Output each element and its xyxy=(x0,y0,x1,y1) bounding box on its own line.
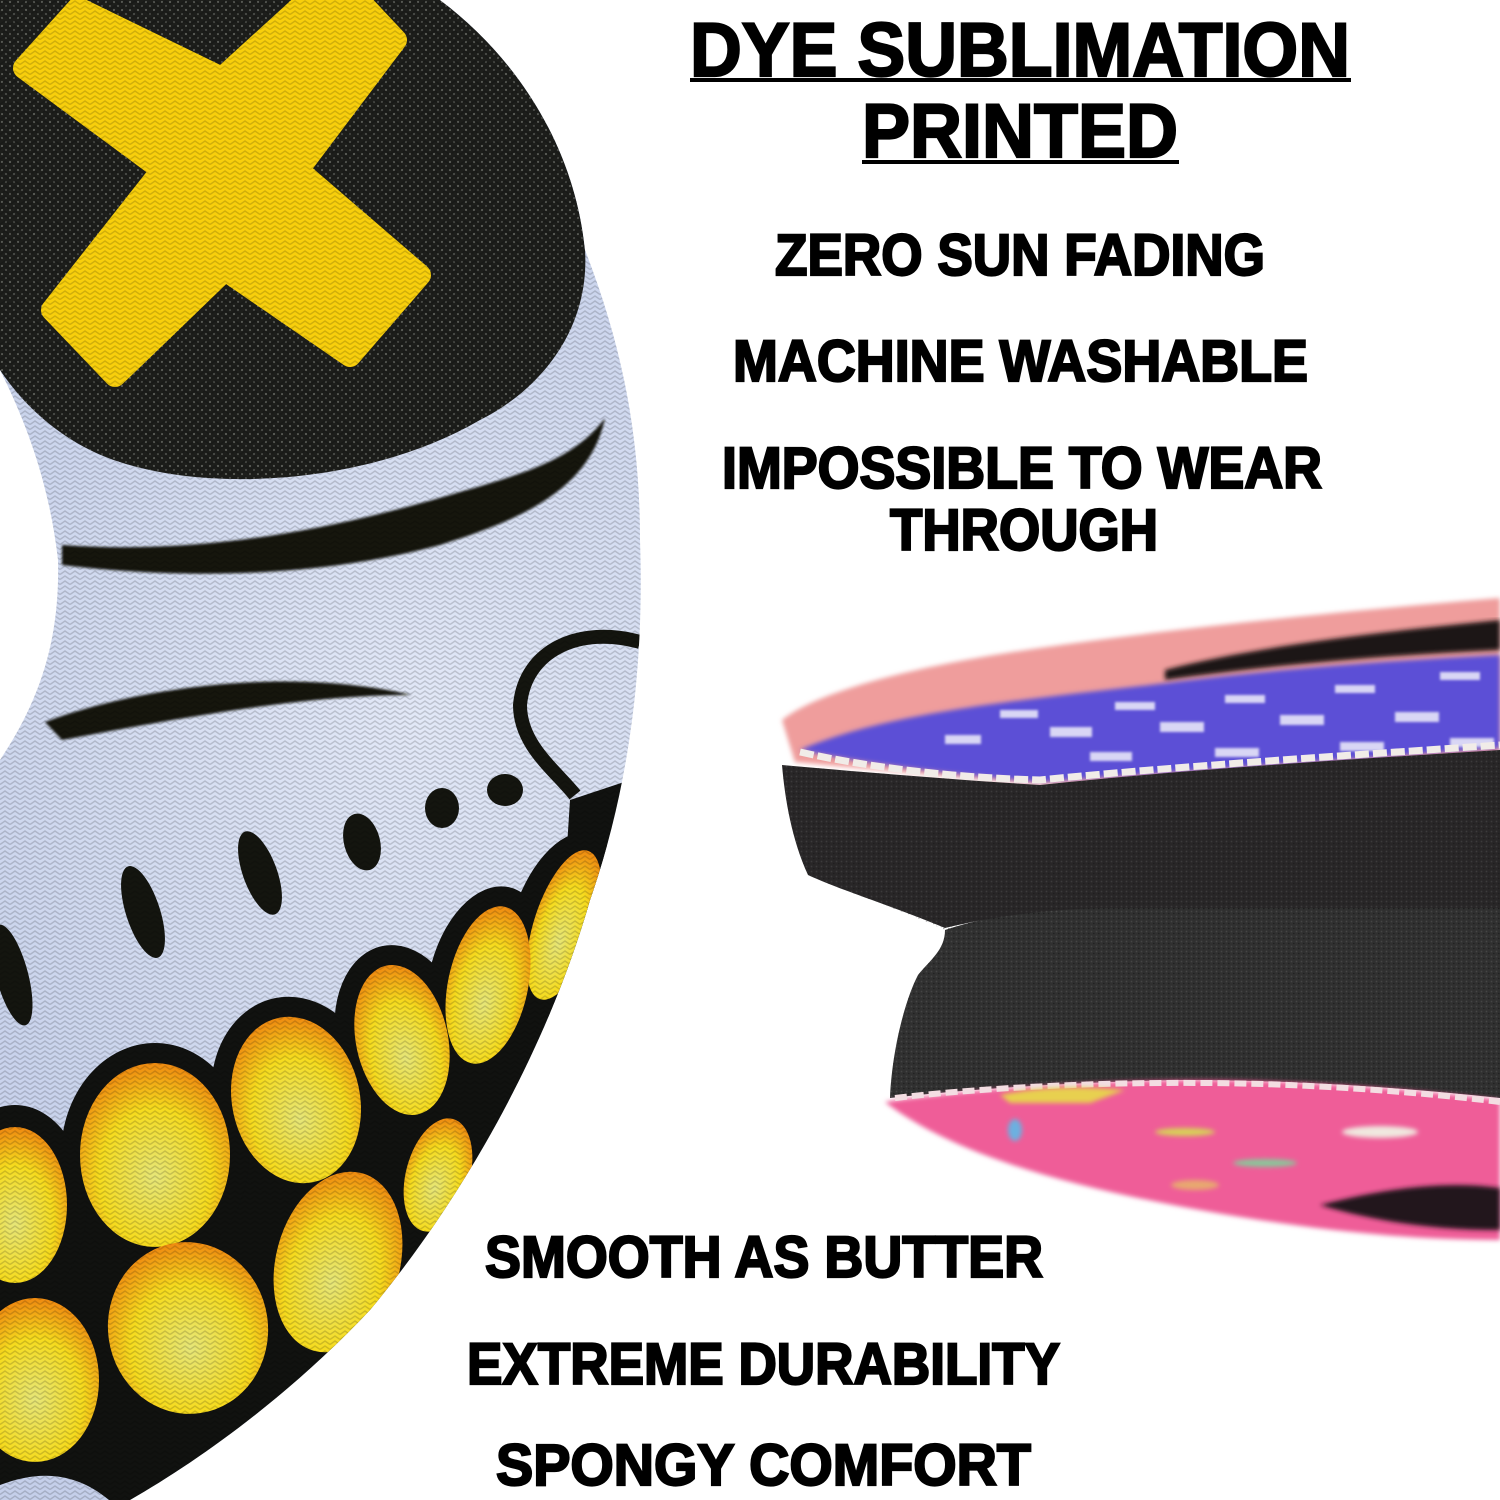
heading: dye sublimation printed: DYE SUBLIMATION xyxy=(690,8,1350,93)
black dots xyxy=(0,774,523,1029)
feature list: print benefits: IMPOSSIBLE TO WEAR xyxy=(722,436,1322,501)
bottom print layer: marks xyxy=(1000,1087,1500,1230)
white stars xyxy=(945,672,1494,761)
bottom print layer: pink xyxy=(885,1080,1500,1240)
top print layer: dark opening xyxy=(1165,620,1500,680)
feature list: foam benefits: EXTREME DURABILITY xyxy=(467,1332,1060,1397)
yellow teeth xyxy=(0,842,617,1462)
upper foam grain xyxy=(780,750,1500,930)
lower black foam xyxy=(890,907,1500,1098)
top print layer: blue stars xyxy=(800,655,1500,782)
lower foam grain xyxy=(880,900,1500,1100)
white fringe on top layer xyxy=(800,745,1500,780)
feature list: foam benefits: SPONGY COMFORT xyxy=(496,1433,1031,1498)
pad fabric base xyxy=(0,0,660,1500)
feature list: print benefits: MACHINE WASHABLE xyxy=(733,329,1308,394)
black eye patch xyxy=(0,0,585,479)
yellow X xyxy=(24,0,420,376)
white fringe on bottom layer xyxy=(895,1083,1500,1102)
feature list: foam benefits xyxy=(467,1225,1060,1498)
lower fabric corner xyxy=(0,1476,120,1500)
patch speckle xyxy=(0,0,600,500)
feature list: foam benefits: SMOOTH AS BUTTER xyxy=(485,1225,1043,1290)
photo: printed ear pad close-up xyxy=(0,0,660,1500)
feature list: print benefits: THROUGH xyxy=(890,498,1158,563)
black curved stroke upper xyxy=(62,418,605,574)
black circle outline xyxy=(520,637,640,795)
black mouth area xyxy=(0,770,660,1500)
upper black foam xyxy=(782,750,1500,928)
black curved stroke middle xyxy=(45,682,412,740)
heading: dye sublimation printed xyxy=(690,8,1351,174)
fabric knit texture xyxy=(0,0,660,1500)
heading: dye sublimation printed: PRINTED xyxy=(862,89,1178,174)
feature list: print benefits: ZERO SUN FADING xyxy=(775,223,1265,288)
top print layer: pink xyxy=(782,598,1500,785)
feature list: print benefits xyxy=(722,223,1322,563)
photo: foam cross-section xyxy=(780,598,1500,1240)
